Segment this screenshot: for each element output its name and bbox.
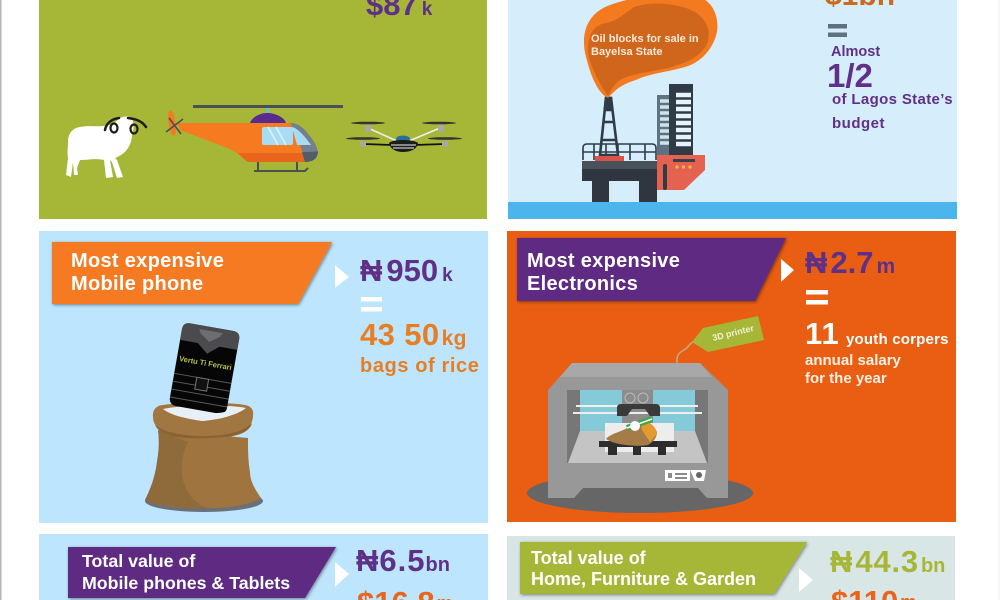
price tag: 3D printer (711, 323, 755, 343)
panel: most expensive mobile phone (39, 231, 488, 523)
icon: drone (346, 122, 462, 152)
panel: total value of mobile phones and tablets (39, 534, 488, 600)
banner: Most expensive (71, 250, 224, 272)
arrow (335, 562, 349, 587)
banner: Most expensive (527, 250, 680, 272)
arrow (335, 265, 349, 288)
banner: Mobile phones & Tablets (82, 573, 290, 593)
icon: oil rig (582, 84, 705, 202)
price: ₦2.7m (805, 245, 895, 280)
flame label: Bayelsa State (591, 46, 663, 58)
banner: Total value of (531, 548, 646, 568)
equals sign (828, 24, 847, 37)
price tag (692, 316, 764, 352)
price in naira: ₦6.5bn (356, 543, 450, 578)
equals sign (806, 290, 828, 304)
panel: drones and helicopters (39, 0, 487, 219)
comparison: for the year (805, 370, 887, 387)
water (508, 202, 957, 219)
panel: total value of home, furniture and garden (507, 536, 955, 600)
panel: most expensive electronics (507, 231, 956, 522)
phone label: Vertu Ti Ferrari (178, 354, 232, 372)
panel: oil blocks (508, 0, 957, 219)
equals sign (361, 297, 382, 312)
banner: Home, Furniture & Garden (531, 569, 756, 589)
icon: sheep (66, 116, 146, 178)
comparison: annual salary (805, 352, 902, 369)
comparison (805, 316, 949, 387)
icon: helicopter (166, 105, 343, 171)
comparison: 11 (805, 316, 840, 351)
comparison text: budget (832, 115, 885, 132)
banner (68, 547, 336, 598)
icon: rice sack with phone (145, 322, 263, 512)
arrow (781, 259, 794, 282)
comparison text: 1/2 (827, 57, 873, 94)
flame label: Oil blocks for sale in (591, 33, 699, 45)
comparison: 43 50kg (360, 317, 467, 352)
comparison text: Almost (831, 44, 880, 60)
icon: 3D printer (527, 316, 764, 513)
comparison: youth corpers (846, 331, 949, 348)
banner: Mobile phone (71, 273, 203, 295)
comparison (360, 317, 479, 377)
comparison text: of Lagos State’s (832, 91, 953, 108)
icon: flame speech bubble (584, 0, 717, 98)
arrow (799, 568, 813, 592)
banner (52, 242, 332, 304)
price in naira: ₦44.3bn (830, 544, 945, 579)
banner: Total value of (82, 551, 195, 571)
banner (520, 542, 807, 594)
price: ₦950k (360, 253, 453, 288)
comparison text (827, 44, 953, 132)
banner (517, 238, 786, 301)
comparison: bags of rice (360, 355, 479, 377)
banner: Electronics (527, 273, 638, 295)
